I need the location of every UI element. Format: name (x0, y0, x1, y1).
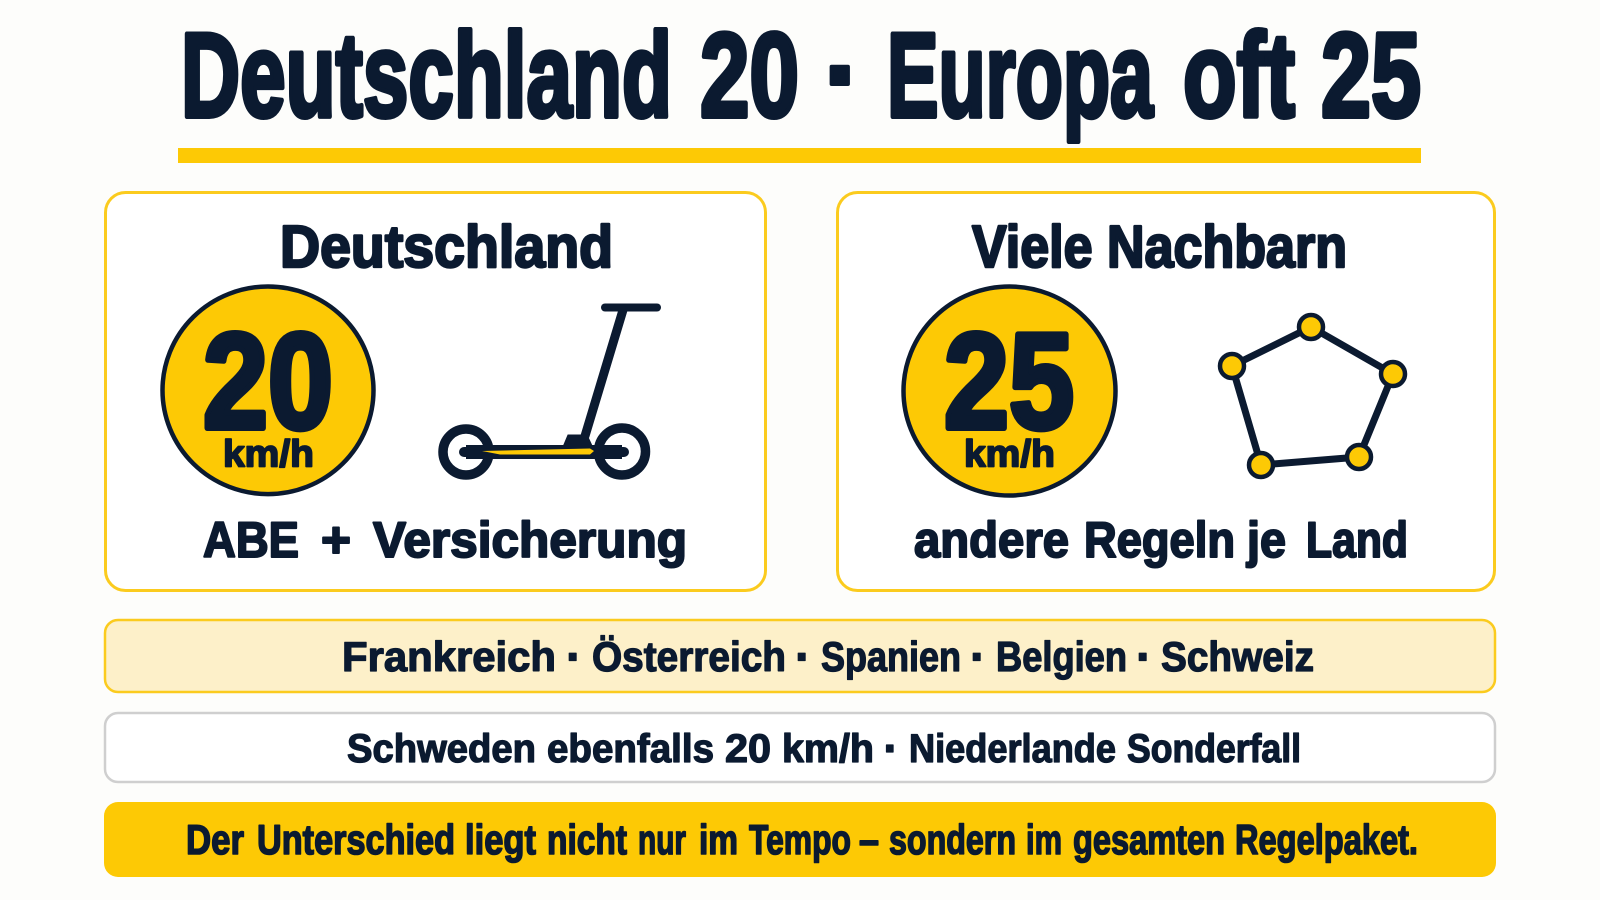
banner: key takeaway: gesamten (1073, 816, 1225, 863)
speed badge: 20 km/h (162, 286, 374, 494)
caption: andere Regeln je Land (914, 512, 1408, 568)
banner: key takeaway: Regelpaket. (1235, 816, 1418, 863)
banner: countries at 25 km/h: Frankreich (342, 633, 556, 680)
banner: key takeaway: Tempo (749, 816, 851, 863)
speed badge: 20 km/h: 20 (203, 305, 333, 457)
icon: e-scooter (443, 308, 657, 475)
title: · (824, 9, 862, 139)
banner: exceptions (105, 713, 1495, 782)
banner: countries at 25 km/h: · (970, 631, 986, 684)
caption: ABE + Versicherung: ABE (203, 512, 299, 568)
speed badge: 25 km/h (904, 286, 1116, 496)
caption: andere Regeln je Land: andere (914, 512, 1069, 568)
title underline (178, 148, 1421, 163)
caption: andere Regeln je Land: je (1246, 512, 1286, 568)
banner: exceptions: Sonderfall (1127, 727, 1301, 771)
icon: country network pentagon (1220, 315, 1405, 477)
banner: countries at 25 km/h: Spanien (821, 633, 961, 680)
banner: key takeaway: im (1026, 816, 1062, 863)
banner: countries at 25 km/h: Österreich (592, 633, 786, 680)
banner: exceptions: Schweden (347, 727, 536, 771)
caption: ABE + Versicherung: + (321, 512, 351, 568)
banner: countries at 25 km/h: · (795, 631, 811, 684)
banner: exceptions: Niederlande (909, 727, 1116, 771)
panel: Deutschland (106, 192, 766, 590)
banner: key takeaway: sondern (889, 816, 1016, 863)
banner: exceptions: · (883, 722, 899, 774)
banner: countries at 25 km/h: · (1136, 631, 1152, 684)
speed badge: 20 km/h: km/h (223, 434, 314, 476)
banner: key takeaway: Unterschied (257, 816, 455, 863)
banner: key takeaway: nicht (547, 816, 627, 863)
banner: exceptions: km/h (782, 727, 874, 771)
title: Europa (887, 8, 1154, 142)
banner: key takeaway (104, 802, 1496, 877)
banner: countries at 25 km/h: · (566, 631, 582, 684)
banner: countries at 25 km/h: Schweiz (1161, 633, 1314, 680)
panel heading: Deutschland: Deutschland (280, 214, 613, 280)
banner: key takeaway: – (859, 816, 879, 863)
caption: ABE + Versicherung (203, 512, 687, 568)
title: Deutschland (181, 8, 672, 142)
banner: key takeaway: Der (186, 816, 244, 863)
banner: exceptions: 20 (725, 727, 771, 771)
banner: countries at 25 km/h (105, 620, 1495, 692)
title (181, 8, 1421, 142)
panel: Viele Nachbarn (838, 192, 1494, 590)
speed badge: 25 km/h: 25 (944, 305, 1074, 457)
panel heading: Viele Nachbarn: Viele Nachbarn (972, 214, 1347, 280)
caption: ABE + Versicherung: Versicherung (373, 512, 687, 568)
title: oft (1183, 8, 1295, 142)
banner: key takeaway: nur (638, 816, 686, 863)
caption: andere Regeln je Land: Land (1306, 512, 1408, 568)
banner: exceptions: ebenfalls (547, 727, 714, 771)
banner: key takeaway: liegt (465, 816, 536, 863)
title: 20 (700, 8, 799, 142)
caption: andere Regeln je Land: Regeln (1084, 512, 1235, 568)
title: 25 (1321, 8, 1421, 142)
banner: key takeaway: im (699, 816, 738, 863)
banner: countries at 25 km/h: Belgien (996, 633, 1127, 680)
speed badge: 25 km/h: km/h (964, 434, 1055, 476)
